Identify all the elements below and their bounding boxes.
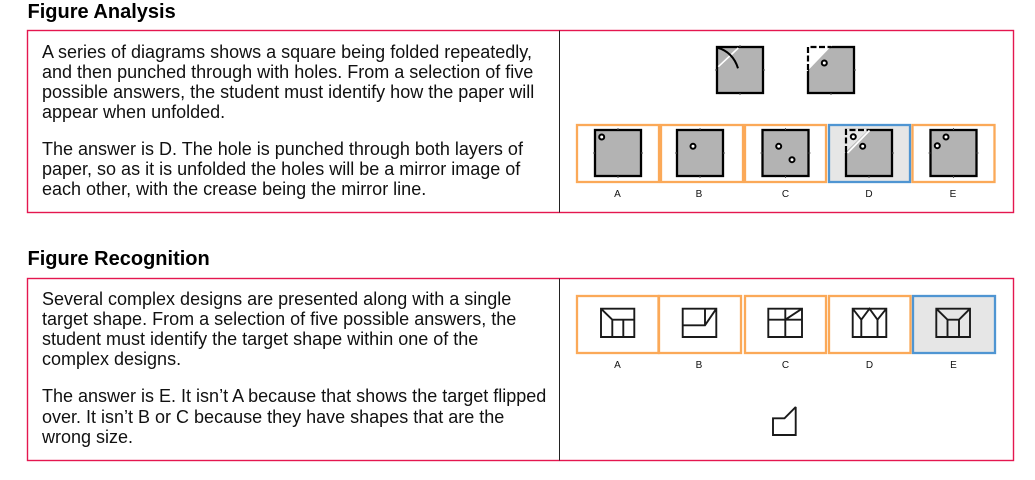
design option E (correct): E bbox=[950, 360, 957, 371]
answer option A: A bbox=[614, 189, 621, 200]
design option C: C bbox=[782, 360, 789, 371]
answer option D (correct) bbox=[829, 125, 910, 200]
text block: figure recognition description bbox=[42, 289, 516, 369]
answer option B bbox=[661, 125, 743, 200]
text block: figure recognition description: target shape. From a selection of five possible answers, the bbox=[42, 309, 516, 329]
answer option E: E bbox=[950, 189, 957, 200]
text block: figure recognition description: Several complex designs are presented along with a single bbox=[42, 289, 511, 309]
design option A: A bbox=[614, 360, 621, 371]
text block: figure recognition description: student must identify the target shape within one of the bbox=[42, 329, 478, 349]
heading: Figure Analysis: Figure Analysis bbox=[28, 1, 176, 23]
icon: folded square bbox=[715, 45, 765, 95]
answer option E bbox=[912, 125, 994, 200]
answer option C bbox=[745, 125, 826, 200]
text block: figure analysis description: appear when unfolded. bbox=[42, 102, 225, 122]
text block: figure recognition description: complex designs. bbox=[42, 349, 181, 369]
answer option A bbox=[577, 125, 659, 200]
design option B: B bbox=[696, 360, 703, 371]
design option A bbox=[577, 296, 658, 371]
text block: figure analysis answer: paper, so as it is unfolded the holes will be a mirror image of bbox=[42, 159, 521, 179]
text block: figure analysis description: A series of diagrams shows a square being folded repeatedly, bbox=[42, 42, 532, 62]
text block: figure analysis answer: The answer is D. The hole is punched through both layers of bbox=[42, 139, 524, 159]
text block: figure recognition answer: over. It isn’t B or C because they have shapes that are the bbox=[42, 407, 504, 427]
panel: figure analysis bbox=[28, 30, 1014, 212]
icon: target shape bbox=[773, 407, 796, 435]
panel: figure recognition bbox=[28, 278, 1014, 460]
text block: figure analysis description: possible answers, the student must identify how the paper will bbox=[42, 82, 534, 102]
text block: figure analysis answer: each other, with the crease being the mirror line. bbox=[42, 179, 426, 199]
text block: figure analysis answer bbox=[42, 139, 524, 199]
answer option C: C bbox=[782, 189, 789, 200]
design option D bbox=[829, 296, 910, 371]
text block: figure analysis description bbox=[42, 42, 534, 122]
design option E (correct) bbox=[913, 296, 995, 371]
design option D: D bbox=[866, 360, 873, 371]
heading: Figure Recognition: Figure Recognition bbox=[28, 248, 210, 270]
icon: punched square bbox=[806, 46, 856, 95]
text block: figure recognition answer bbox=[41, 386, 546, 447]
answer option B: B bbox=[696, 189, 703, 200]
design option B bbox=[659, 296, 741, 371]
text block: figure analysis description: and then punched through with holes. From a selection of five bbox=[42, 62, 533, 82]
design option C bbox=[745, 296, 826, 371]
text block: figure recognition answer: wrong size. bbox=[41, 427, 133, 447]
text block: figure recognition answer: The answer is E. It isn’t A because that shows the target flipped bbox=[42, 386, 546, 406]
answer option D (correct): D bbox=[865, 189, 873, 200]
